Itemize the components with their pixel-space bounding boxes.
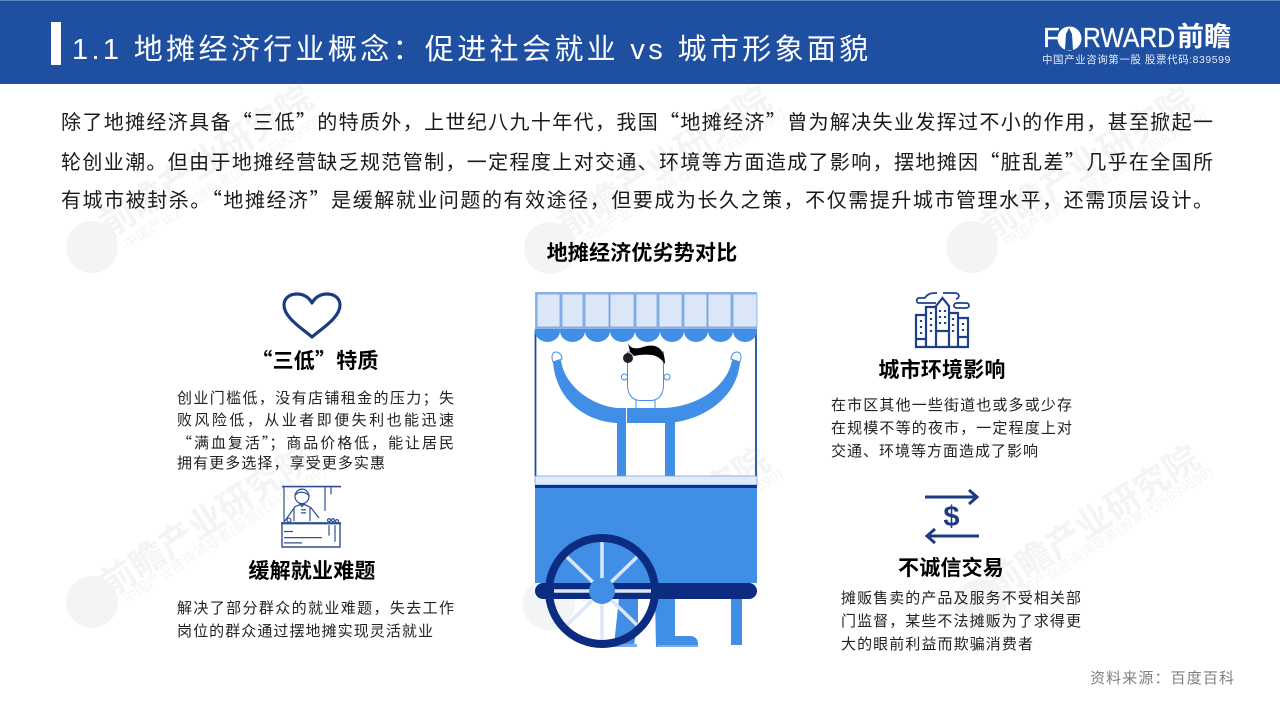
text: three lows: 拥有更多选择，享受更多实惠 xyxy=(177,455,385,472)
vendor figure xyxy=(552,343,741,476)
cart body xyxy=(535,488,757,583)
watermarks: 前瞻产业研究院 xyxy=(980,439,1207,605)
title: 1.1 地摊经济行业概念：促进社会就业 vs 城市形象面貌 xyxy=(72,34,872,66)
watermarks: 前瞻产业研究院 xyxy=(93,439,320,605)
logo wordmark: F xyxy=(1043,22,1060,53)
logo tagline: 中国产业咨询第一股 股票代码:839599 xyxy=(1042,54,1231,66)
text: city environment: 交通、环境等方面造成了影响 xyxy=(831,443,1038,460)
counter ledge xyxy=(535,476,757,485)
intro paragraph: 除了地摊经济具备“三低”的特质外，上世纪八九十年代，我国“地摊经济”曾为解决失业发挥过不小的作用，甚至掀起一 xyxy=(61,106,1213,135)
watermarks: 前瞻产业研究院 xyxy=(974,81,1201,247)
awning panels xyxy=(535,292,757,330)
text: employment: 岗位的群众通过摆地摊实现灵活就业 xyxy=(177,623,433,640)
intro paragraph xyxy=(61,106,1213,213)
text: dishonest transaction: 大的眼前利益而欺骗消费者 xyxy=(841,636,1033,653)
text: dishonest transaction xyxy=(841,590,1081,653)
suspenders xyxy=(617,420,626,476)
hair xyxy=(628,343,665,364)
heading: three lows: “三低”特质 xyxy=(251,345,379,375)
neck and head xyxy=(636,400,655,408)
icon: dishonest transaction xyxy=(924,489,980,544)
icon: dishonest transaction: $ xyxy=(943,501,960,533)
text: city environment: 在市区其他一些街道也或多或少存 xyxy=(831,397,1072,414)
text: employment xyxy=(177,600,454,640)
chart heading: 地摊经济优劣势对比 xyxy=(547,242,737,265)
window frame xyxy=(536,330,756,476)
text: three lows: “满血复活”；商品价格低，能让居民 xyxy=(177,432,454,453)
watermarks: 前瞻产业研究院 xyxy=(550,441,777,607)
intro paragraph: 轮创业潮。但由于地摊经营缺乏规范管制，一定程度上对交通、环境等方面造成了影响，摆地摊因“脏乱差”几乎在全国所 xyxy=(61,146,1213,175)
logo wordmark xyxy=(1043,22,1231,53)
logo xyxy=(1042,22,1231,66)
watermarks: 中国产业咨询领导者(股票代码839599) xyxy=(1007,463,1215,607)
text: city environment: 在规模不等的夜市，一定程度上对 xyxy=(831,420,1072,437)
heading: city environment: 城市环境影响 xyxy=(878,359,1006,382)
header bar xyxy=(0,0,1280,84)
icon: city xyxy=(914,292,970,348)
text: three lows xyxy=(177,390,454,472)
watermarks: 前瞻产业研究院 xyxy=(93,79,320,245)
text: three lows: 创业门槛低，没有店铺租金的压力；失 xyxy=(177,390,454,407)
wheel xyxy=(549,538,655,644)
watermarks: 中国产业咨询领导者(股票代码839599) xyxy=(121,108,329,252)
watermarks: 中国产业咨询领导者(股票代码839599) xyxy=(579,104,787,248)
watermarks: 中国产业咨询领导者(股票代码839599) xyxy=(120,463,328,607)
source note: 资料来源：百度百科 xyxy=(1090,670,1234,687)
illustration: food cart xyxy=(534,292,758,648)
arms xyxy=(553,360,740,423)
intro paragraph: 有城市被封杀。“地摊经济”是缓解就业问题的有效途径，但要成为长久之策，不仅需提升城市管理水平，还需顶层设计。 xyxy=(61,184,1213,213)
text: dishonest transaction: 门监督，某些不法摊贩为了求得更 xyxy=(841,613,1081,630)
watermarks: 中国产业咨询领导者(股票代码839599) xyxy=(1001,106,1209,250)
icon: vendor xyxy=(281,486,341,548)
text: employment: 解决了部分群众的就业难题，失去工作 xyxy=(177,600,454,617)
icon: heart xyxy=(282,292,342,339)
watermarks: 前瞻产业研究院 xyxy=(551,80,778,246)
heading: dishonest transaction: 不诚信交易 xyxy=(898,557,1004,580)
watermarks: 中国产业咨询领导者(股票代码839599) xyxy=(577,465,785,609)
text: dishonest transaction: 摊贩售卖的产品及服务不受相关部 xyxy=(841,590,1081,607)
text: three lows: 败风险低，从业者即便失利也能迅速 xyxy=(177,412,454,429)
awning scallops xyxy=(535,329,757,342)
logo wordmark: RWARD xyxy=(1083,22,1175,53)
title marker xyxy=(51,22,61,65)
logo wordmark: 前瞻 xyxy=(1177,22,1231,52)
heading: employment: 缓解就业难题 xyxy=(248,560,376,583)
text: city environment xyxy=(831,397,1072,460)
cart handle xyxy=(535,583,757,599)
legs xyxy=(597,598,742,647)
